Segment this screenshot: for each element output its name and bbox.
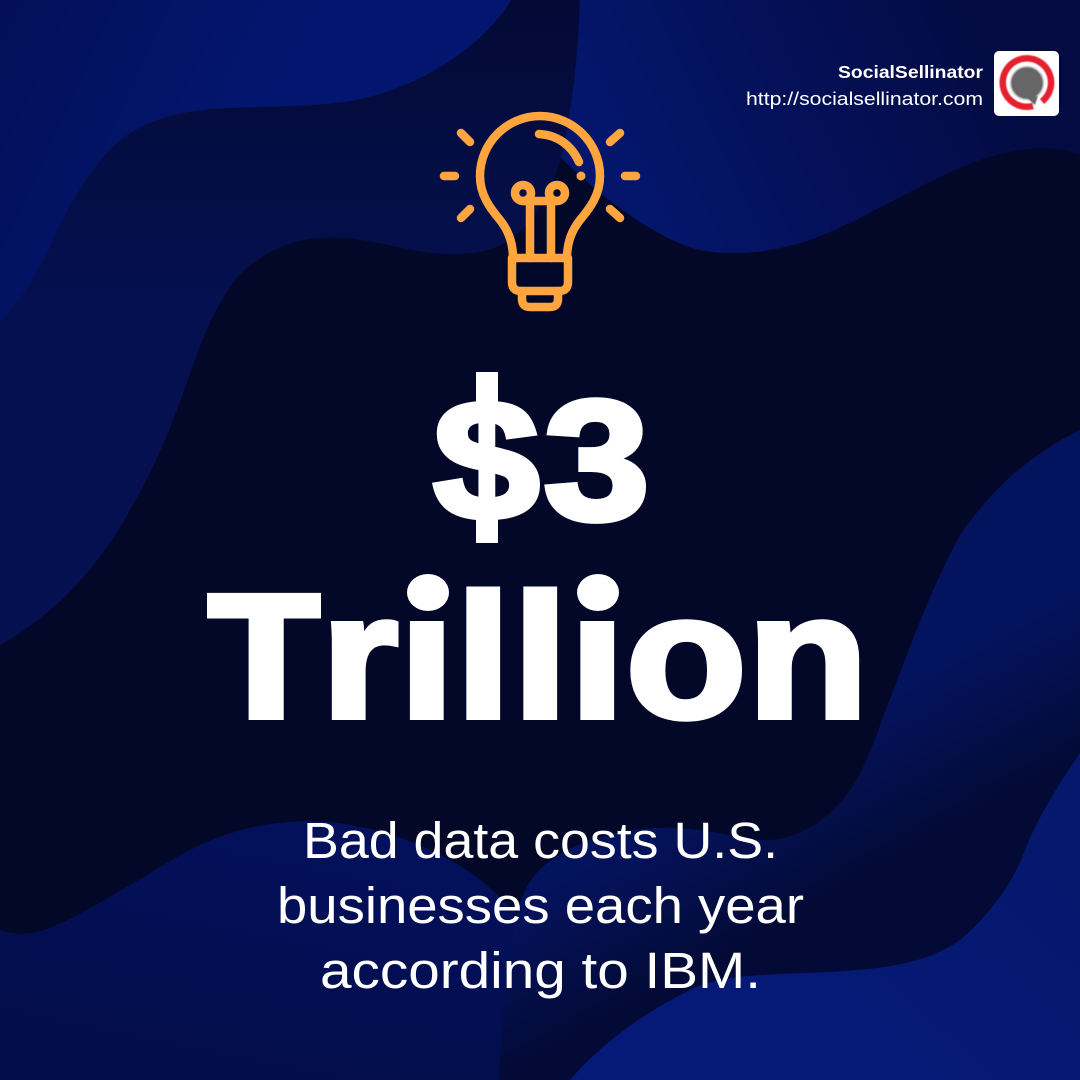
headline line 1: $3 [433,366,650,556]
headline: $3 Trillion [197,366,868,755]
headline line 2: Trillion [206,558,868,755]
wave: top-right [561,0,1080,253]
description line 1: Bad data costs U.S. [303,812,778,869]
description line 3: according to IBM. [320,942,761,999]
wave: upper-left mid layer [0,0,580,645]
wave: bottom-right bright [570,753,1080,1080]
logo [994,51,1059,116]
brand name: SocialSellinator [838,62,983,82]
description line 2: businesses each year [277,877,804,934]
brand header [746,51,1059,116]
icon: light bulb [444,116,636,307]
description text [277,812,804,999]
brand url: http://socialsellinator.com [746,89,983,109]
wave: top-left bright [0,0,511,322]
wave: right mid layer [499,430,1080,1080]
wave: bottom-left [0,821,515,1080]
